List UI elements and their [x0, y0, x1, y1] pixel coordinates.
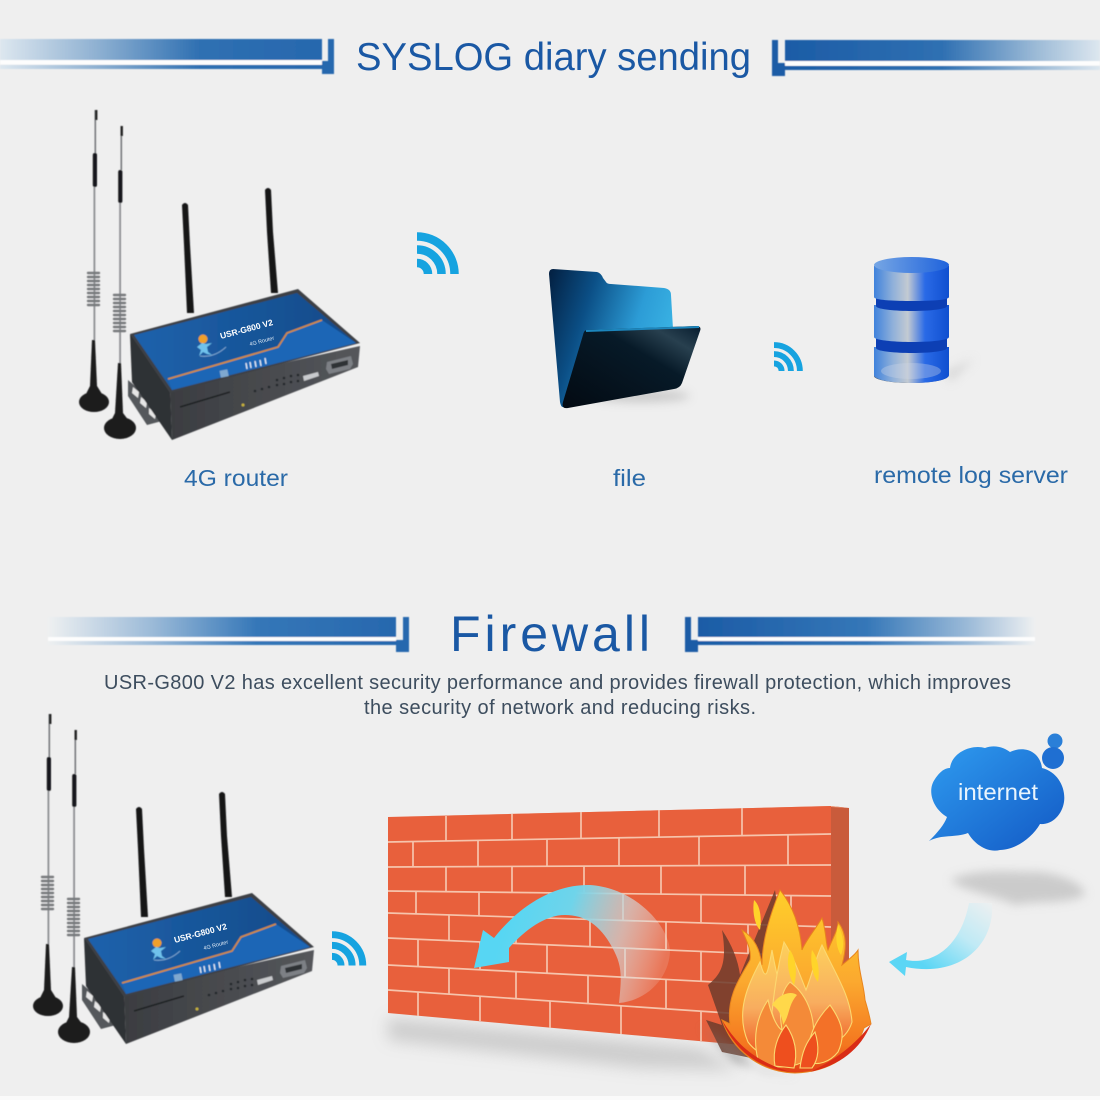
callout: internet cloud: internet	[958, 779, 1039, 805]
heading: SYSLOG diary sending: SYSLOG diary sending	[356, 36, 751, 79]
panel: Firewall	[33, 606, 1085, 1078]
panel: SYSLOG diary sending	[0, 36, 1100, 491]
label: 4G router: 4G router	[184, 465, 288, 491]
image: 4G router with antennas, second view: USR-G800 V2	[173, 921, 228, 945]
icon: wifi signal beside router	[332, 935, 363, 965]
image: 4G router with antennas, second view: 4G Router	[203, 940, 229, 952]
header rule: right	[685, 617, 1035, 652]
arrow: internet traffic toward firewall	[889, 903, 992, 976]
bottom edge strip	[0, 1096, 1100, 1100]
heading: Firewall: Firewall	[450, 606, 650, 662]
text: firewall description: USR-G800 V2 has excellent security performance and provides firewall protection, which improves	[104, 672, 1011, 694]
icon: large wifi signal	[417, 236, 454, 274]
icon: database cylinder	[874, 257, 975, 383]
icon: small wifi signal	[774, 345, 800, 371]
header rule: right	[772, 40, 1100, 76]
image: 4G router with antennas, second view	[33, 714, 314, 1044]
shadow under cloud	[950, 871, 1085, 905]
callout: internet cloud	[929, 734, 1064, 851]
header rule: left	[48, 617, 409, 652]
illustration: brick wall	[388, 806, 849, 1070]
label: remote log server: remote log server	[874, 462, 1068, 488]
illustration: fire	[700, 890, 871, 1078]
icon: blue folder	[549, 269, 700, 408]
label: file: file	[613, 465, 646, 491]
image: 4G router with antennas: 4G Router	[249, 336, 275, 348]
image: 4G router with antennas	[79, 110, 360, 440]
header rule: left	[0, 39, 334, 74]
arrow: deflected inside wall	[474, 885, 670, 1003]
text: firewall description: the security of network and reducing risks.	[364, 697, 756, 719]
image: 4G router with antennas: USR-G800 V2	[219, 317, 274, 341]
